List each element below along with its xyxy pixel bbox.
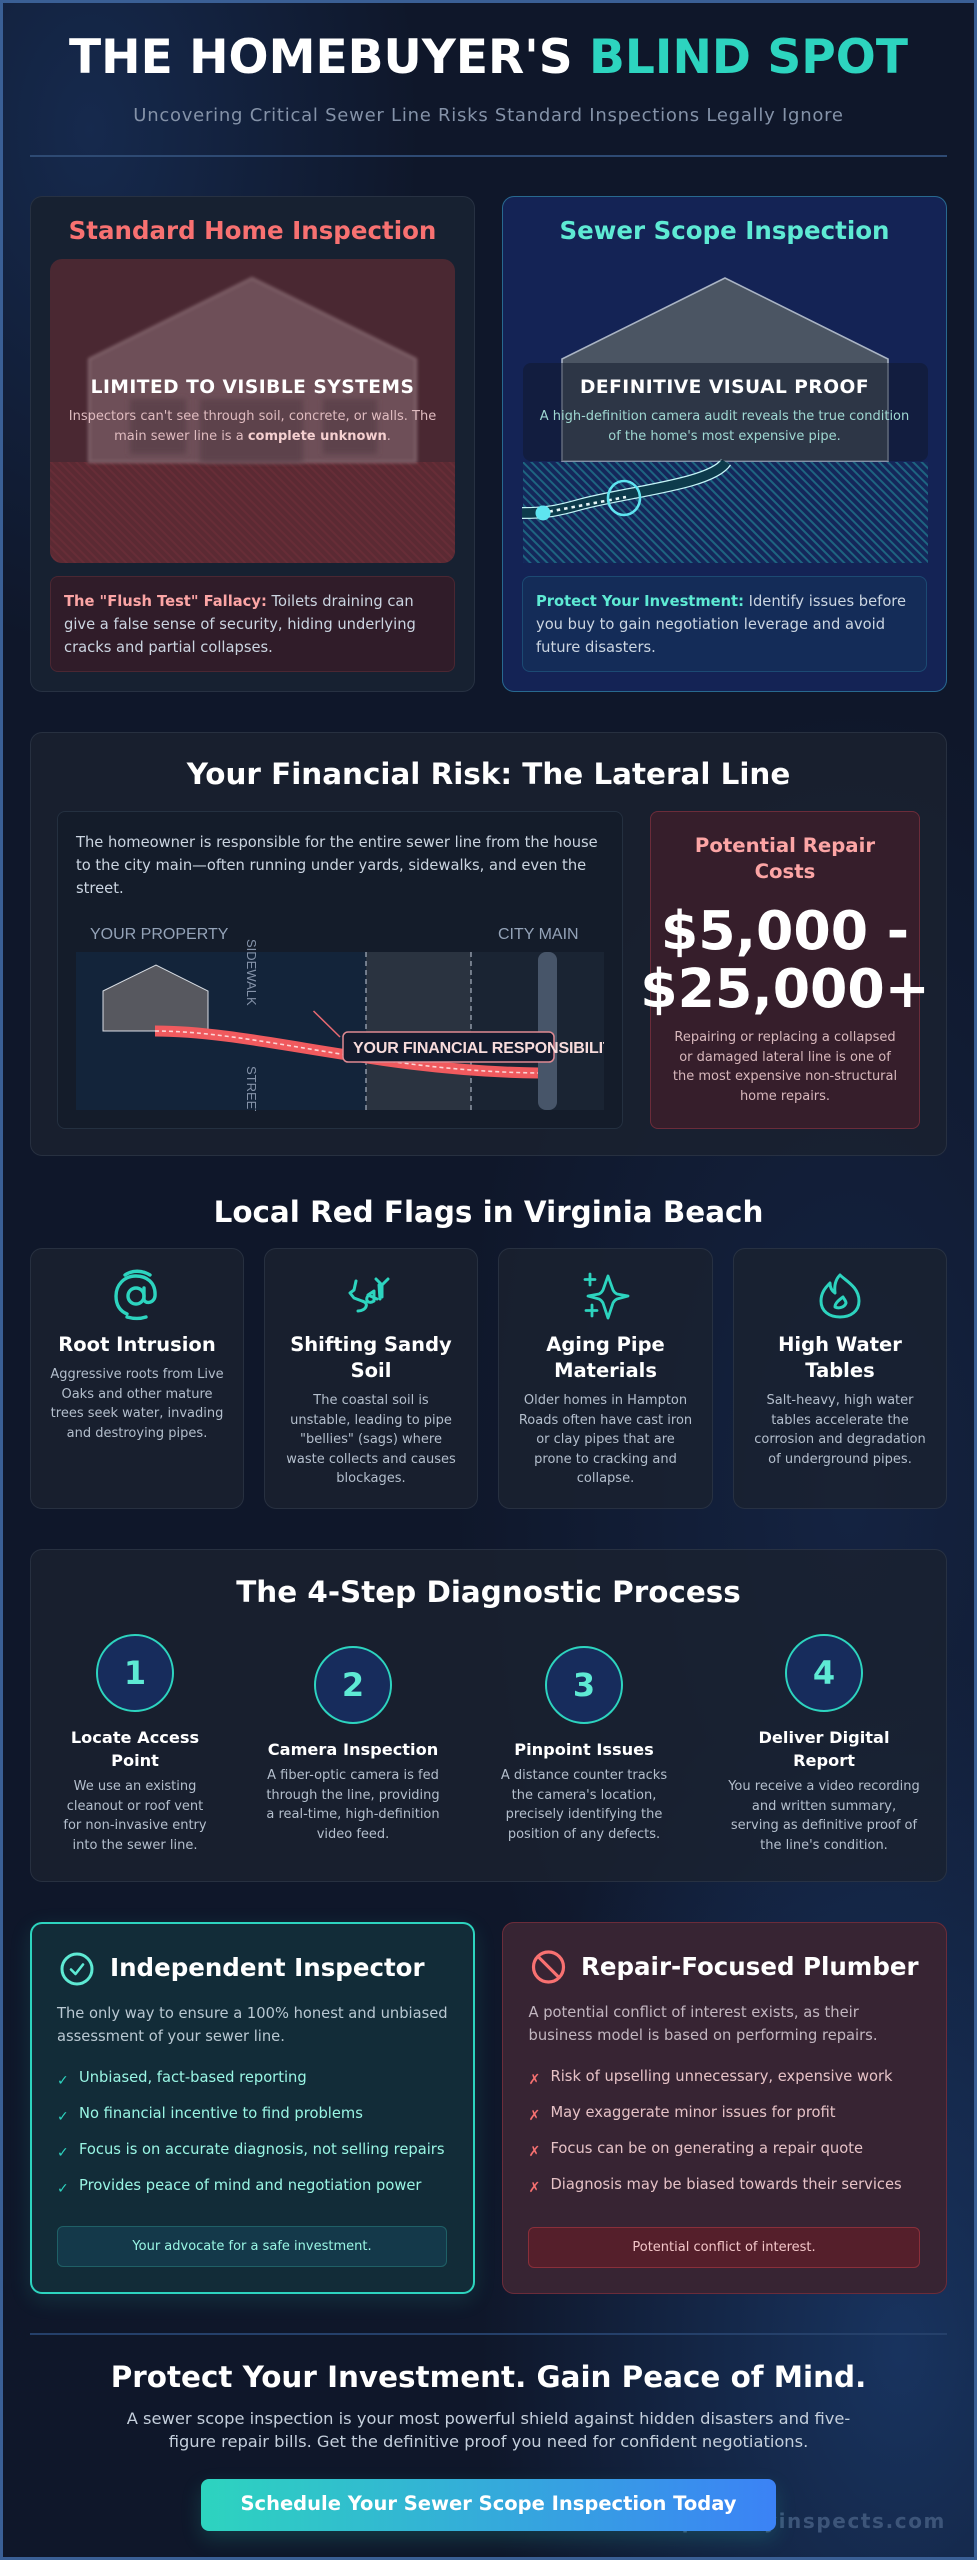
verdict box: Potential conflict of interest. [632,2240,816,2255]
title: Tables [805,1359,875,1382]
overlay text: of the home's most expensive pipe. [608,429,841,444]
step title [758,1728,890,1770]
title: Independent Inspector [110,1953,425,1982]
step 4 [728,1634,920,1853]
title: Soil [351,1359,391,1382]
description: Roads often have cast iron [519,1413,692,1428]
step description: into the sewer line. [72,1838,197,1853]
callout text: future disasters. [536,639,656,656]
step description: for non-invasive entry [63,1818,207,1833]
description: street. [76,880,124,897]
description: trees seek water, invading [51,1406,223,1421]
description: to the city main—often running under yards, sidewalks, and even the [76,857,586,874]
verdict box [528,2227,920,2268]
description: of underground pipes. [768,1452,912,1467]
overlay text [69,409,436,444]
callout: protect [522,576,927,672]
step number [785,1634,863,1712]
cons list: May exaggerate minor issues for profit [550,2104,836,2121]
call to action button [201,2479,776,2531]
callout text: The "Flush Test" Fallacy: Toilets draining can [64,593,414,610]
step 3 [501,1646,667,1842]
description: corrosion and degradation [754,1432,926,1447]
illustration: camera in pipe [522,277,928,563]
step description [728,1779,920,1853]
icon: prohibited [532,1950,566,1984]
step description: precisely identifying the [506,1807,662,1822]
card: root intrusion [30,1248,244,1509]
step title: Point [111,1751,159,1770]
cons list: ✗ [528,2180,540,2196]
step number [545,1646,623,1724]
title [290,1333,452,1382]
panel: standard home inspection [30,196,475,692]
step description: and written summary, [752,1799,896,1814]
callout text: you buy to gain negotiation leverage and avoid [536,616,885,633]
description: or clay pipes that are [536,1432,675,1447]
lateral line diagram [76,926,604,1111]
description: blockages. [336,1471,406,1486]
pros list: Unbiased, fact-based reporting [79,2069,307,2086]
description [50,1367,224,1441]
step description: position of any defects. [508,1827,660,1842]
callout text: Protect Your Investment: Identify issues before [536,593,906,610]
description: unstable, leading to pipe [290,1413,452,1428]
card: aging pipes [498,1248,713,1509]
callout text: give a false sense of security, hiding underlying [64,616,416,633]
step title: Camera Inspection [268,1740,438,1759]
cons list: Risk of upselling unnecessary, expensive work [550,2068,893,2085]
repair amount [640,899,930,1020]
icon: sparkle [584,1272,630,1320]
repair note: the most expensive non-structural [673,1069,897,1084]
illustration: obscured house [50,259,455,563]
description [519,1393,692,1486]
callout: flush test [50,576,455,672]
heading: The 4-Step Diagnostic Process [236,1575,741,1609]
overlay text: Inspectors can't see through soil, concrete, or walls. The [69,409,436,424]
pros list: Provides peace of mind and negotiation power [79,2177,421,2194]
intro: business model is based on performing repairs. [528,2026,878,2044]
repair amount: $25,000+ [640,957,930,1020]
footer divider [30,2333,947,2335]
pros list: ✓ [57,2073,69,2089]
step description [266,1768,440,1842]
step description: through the line, providing [266,1788,440,1803]
pros list: ✓ [57,2145,69,2161]
title: Repair-Focused Plumber [581,1952,919,1981]
overlay text: main sewer line is a complete unknown. [114,429,391,444]
header [69,30,908,126]
verdict box: Your advocate for a safe investment. [132,2239,372,2254]
subtitle: Uncovering Critical Sewer Line Risks Standard Inspections Legally Ignore [133,105,844,126]
repair costs box [650,811,920,1129]
step 2 [266,1646,440,1842]
step title: Locate Access [71,1728,199,1747]
callout text [64,593,416,656]
cons list: Focus can be on generating a repair quote [550,2140,863,2157]
repair heading: Potential Repair [695,834,875,857]
step 1 [63,1634,207,1853]
step description: the line's condition. [760,1838,888,1853]
cons list: Diagnosis may be biased towards their services [550,2176,902,2193]
lateral line diagram: CITY MAIN [498,926,579,943]
title: Aging Pipe [546,1333,665,1356]
description: waste collects and causes [286,1452,456,1467]
step description: A distance counter tracks [501,1768,667,1783]
step description: the camera's location, [512,1788,656,1803]
heading: local red flags: Local Red Flags in Virginia Beach [214,1195,763,1229]
description [286,1393,456,1486]
panel: independent inspector [30,1922,475,2294]
description: Oaks and other mature [61,1387,212,1402]
step description: video feed. [317,1827,389,1842]
description: collapse. [577,1471,634,1486]
intro: assessment of your sewer line. [57,2028,285,2044]
step description: a real-time, high-definition [266,1807,440,1822]
card: water tables [733,1248,947,1509]
description: Aggressive roots from Live [50,1367,224,1382]
callout text: cracks and partial collapses. [64,639,273,656]
repair note [673,1030,897,1104]
cons list: ✗ [528,2144,540,2160]
title [546,1333,665,1382]
overlay text: A high-definition camera audit reveals the true condition [540,409,909,424]
step description: We use an existing [74,1779,196,1794]
pros list [57,2069,444,2197]
title: Shifting Sandy [290,1333,452,1356]
step description [501,1768,667,1842]
title: Materials [554,1359,657,1382]
description: and destroying pipes. [67,1426,207,1441]
step number: 3 [573,1666,595,1704]
watermark: priorityinspects.com [682,2509,946,2533]
repair note: Repairing or replacing a collapsed [674,1030,896,1045]
step number [96,1634,174,1712]
description: tables accelerate the [771,1413,909,1428]
repair note: home repairs. [740,1089,830,1104]
header divider [30,155,947,157]
panel: financial risk [30,732,947,1156]
step description [63,1779,207,1853]
step number: 1 [124,1654,146,1692]
cons list: ✗ [528,2108,540,2124]
description: Older homes in Hampton [524,1393,687,1408]
card: sandy soil [264,1248,478,1509]
overlay label: LIMITED TO VISIBLE SYSTEMS [91,377,414,398]
overlay label: DEFINITIVE VISUAL PROOF [580,377,869,398]
description [76,834,598,897]
description: The homeowner is responsible for the entire sewer line from the house [76,834,598,851]
step title: Report [793,1751,855,1770]
description: The coastal soil is [313,1393,429,1408]
overlay text [540,409,909,444]
description: "bellies" (sags) where [300,1432,442,1447]
icon: check circle [60,1952,94,1986]
step description: A fiber-optic camera is fed [267,1768,439,1783]
repair note: or damaged lateral line is one of [679,1050,891,1065]
step description: You receive a video recording [728,1779,920,1794]
callout text [536,593,906,656]
intro [56,2004,448,2044]
heading: Your Financial Risk: The Lateral Line [187,757,790,791]
lateral line diagram: YOUR PROPERTY [90,926,229,943]
title: High Water [778,1333,902,1356]
repair amount: $5,000 - [661,899,909,962]
icon: root [114,1270,157,1320]
step number [314,1646,392,1724]
intro: The only way to ensure a 100% honest and unbiased [57,2004,448,2022]
panel: 4-step process [30,1549,947,1882]
icon: soil [348,1277,390,1312]
panel: repair-focused plumber [502,1922,947,2294]
step number: 4 [813,1654,835,1692]
call to action text: figure repair bills. Get the definitive proof you need for confident negotiations. [169,2432,808,2451]
heading: Standard Home Inspection [69,216,436,245]
verdict box [57,2226,447,2267]
intro: A potential conflict of interest exists, as their [528,2004,859,2020]
repair heading [695,834,876,883]
call to action button: Schedule Your Sewer Scope Inspection Today [240,2492,737,2515]
step number: 2 [342,1666,364,1704]
heading: Sewer Scope Inspection [559,216,890,245]
step title: Pinpoint Issues [514,1740,654,1759]
call to action text: A sewer scope inspection is your most powerful shield against hidden disasters and five- [127,2409,850,2428]
pros list: No financial incentive to find problems [79,2105,363,2122]
intro [528,2004,878,2044]
description: Salt-heavy, high water [766,1393,914,1408]
title: THE HOMEBUYER'S BLIND SPOT [69,30,908,85]
step title [71,1728,199,1770]
call to action heading: Protect Your Investment. Gain Peace of Mind. [111,2360,866,2394]
panel: sewer scope inspection [502,196,947,692]
title: Root Intrusion [58,1333,216,1356]
overlay card [523,363,928,461]
icon: flame [820,1273,860,1318]
lateral line diagram: SIDEWALK [244,939,259,1006]
repair heading: Costs [755,860,815,883]
call to action text [126,2409,850,2451]
description [754,1393,926,1467]
step title: Deliver Digital [758,1728,890,1747]
title [778,1333,902,1382]
description: prone to cracking and [534,1452,677,1467]
step description: serving as definitive proof of [731,1818,917,1833]
pros list: ✓ [57,2109,69,2125]
cons list: ✗ [528,2072,540,2088]
lateral line box [57,811,623,1129]
pros list: Focus is on accurate diagnosis, not selling repairs [79,2141,444,2158]
pros list: ✓ [57,2181,69,2197]
step description: cleanout or roof vent [67,1799,203,1814]
cons list [528,2068,902,2196]
